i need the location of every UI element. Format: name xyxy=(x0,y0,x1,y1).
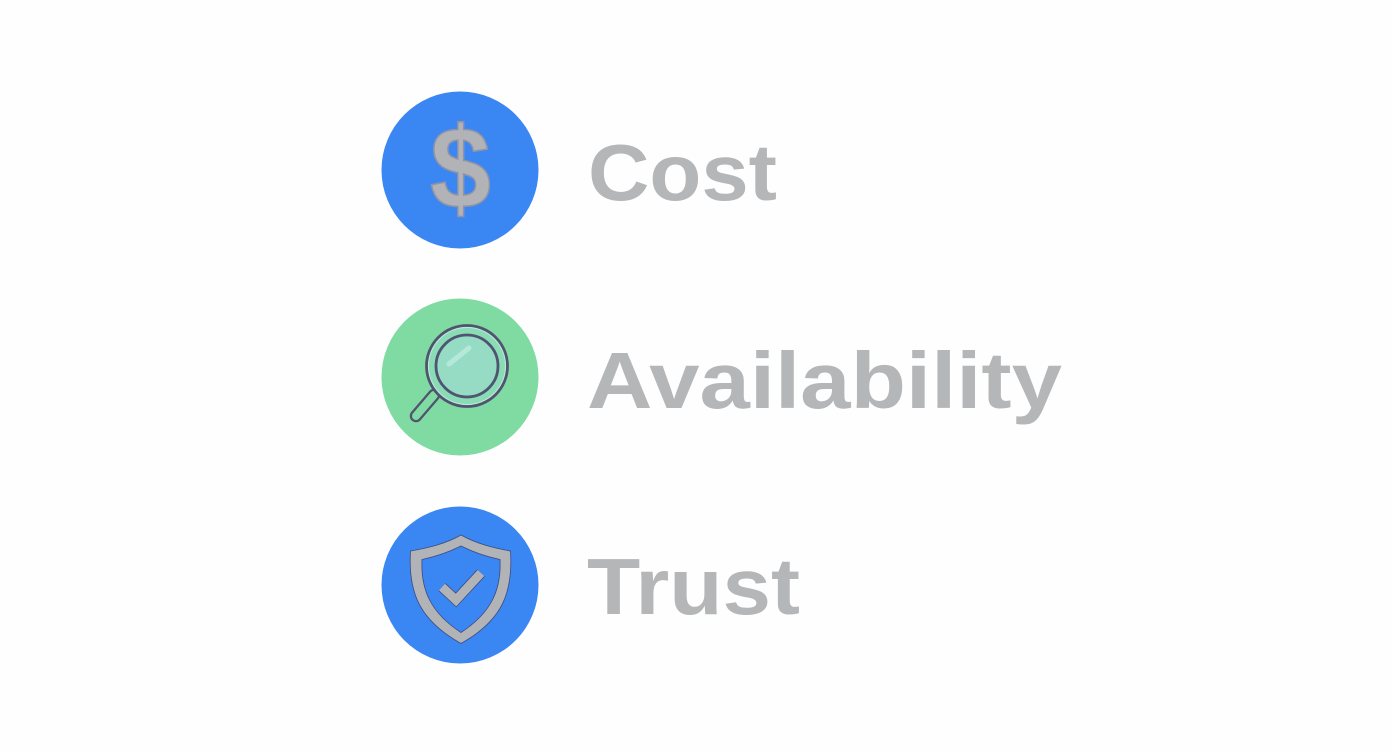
row: cost xyxy=(382,92,777,248)
icon: shield with check in blue circle xyxy=(382,506,538,664)
row: availability xyxy=(382,298,1063,456)
row: trust xyxy=(382,506,800,664)
icon: dollar sign in blue circle: $ xyxy=(430,103,491,233)
icon: dollar sign in blue circle xyxy=(382,92,538,248)
label: trust: Trust xyxy=(587,542,800,631)
label: availability: Availability xyxy=(587,336,1063,425)
icon: magnifying glass in green circle xyxy=(382,298,538,456)
label: cost: Cost xyxy=(588,128,777,217)
